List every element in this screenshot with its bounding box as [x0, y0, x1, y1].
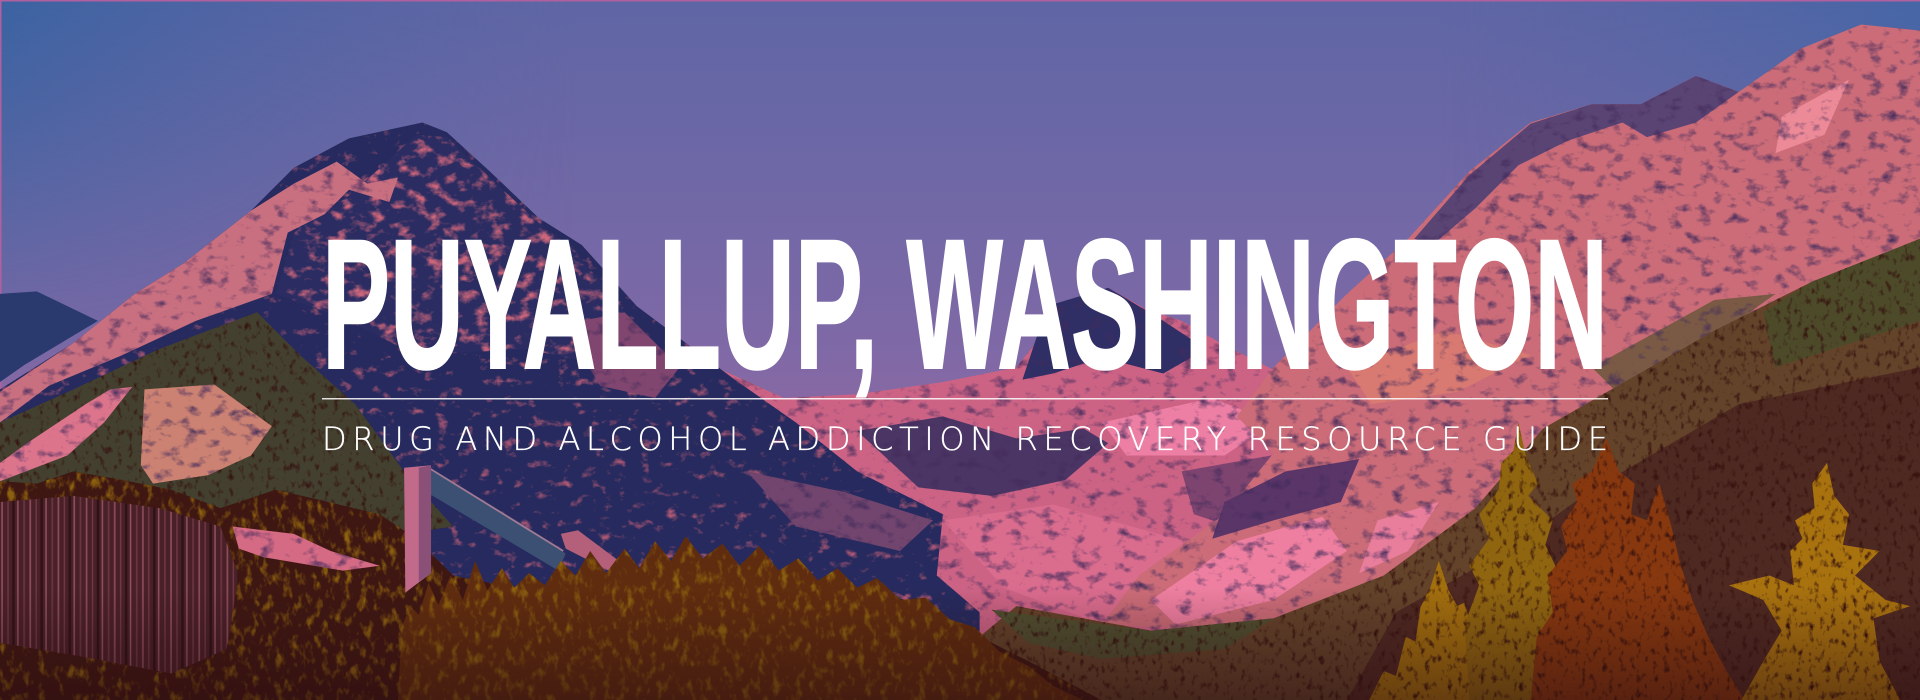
ski jump tower and ramp: [404, 465, 627, 593]
left mountain, dark shaded face: [0, 122, 980, 700]
bottom shading: [0, 588, 1920, 700]
green slope and ski runs: [0, 312, 453, 539]
ski run, right: [141, 384, 272, 484]
tree: amber, tall: [1465, 422, 1565, 700]
tree: amber, left: [1369, 561, 1512, 700]
left mountain, sunlit pink face: [0, 162, 398, 422]
dead tree stand: [0, 496, 239, 673]
ski run, left: [0, 387, 132, 481]
central valley rock: [716, 288, 1567, 700]
foreground forest treetops: [398, 536, 1084, 700]
right forested slope: [980, 239, 1920, 700]
sky: [0, 0, 1920, 398]
left forest: [0, 471, 1102, 700]
tree: amber, right: [1729, 463, 1910, 700]
left mountain, upper rock with pink specks: [276, 135, 661, 367]
distant dark mountain, left: [0, 291, 98, 382]
divider rule: [322, 398, 1608, 400]
tree: rust, large: [1531, 438, 1745, 700]
right mountain rock face: [1102, 24, 1920, 631]
forest clearing: [233, 527, 380, 571]
subtitle: DRUG AND ALCOHOL ADDICTION RECOVERY RESOURCE GUIDE: [322, 420, 1608, 458]
left mountain, pink rock patches: [563, 312, 933, 551]
